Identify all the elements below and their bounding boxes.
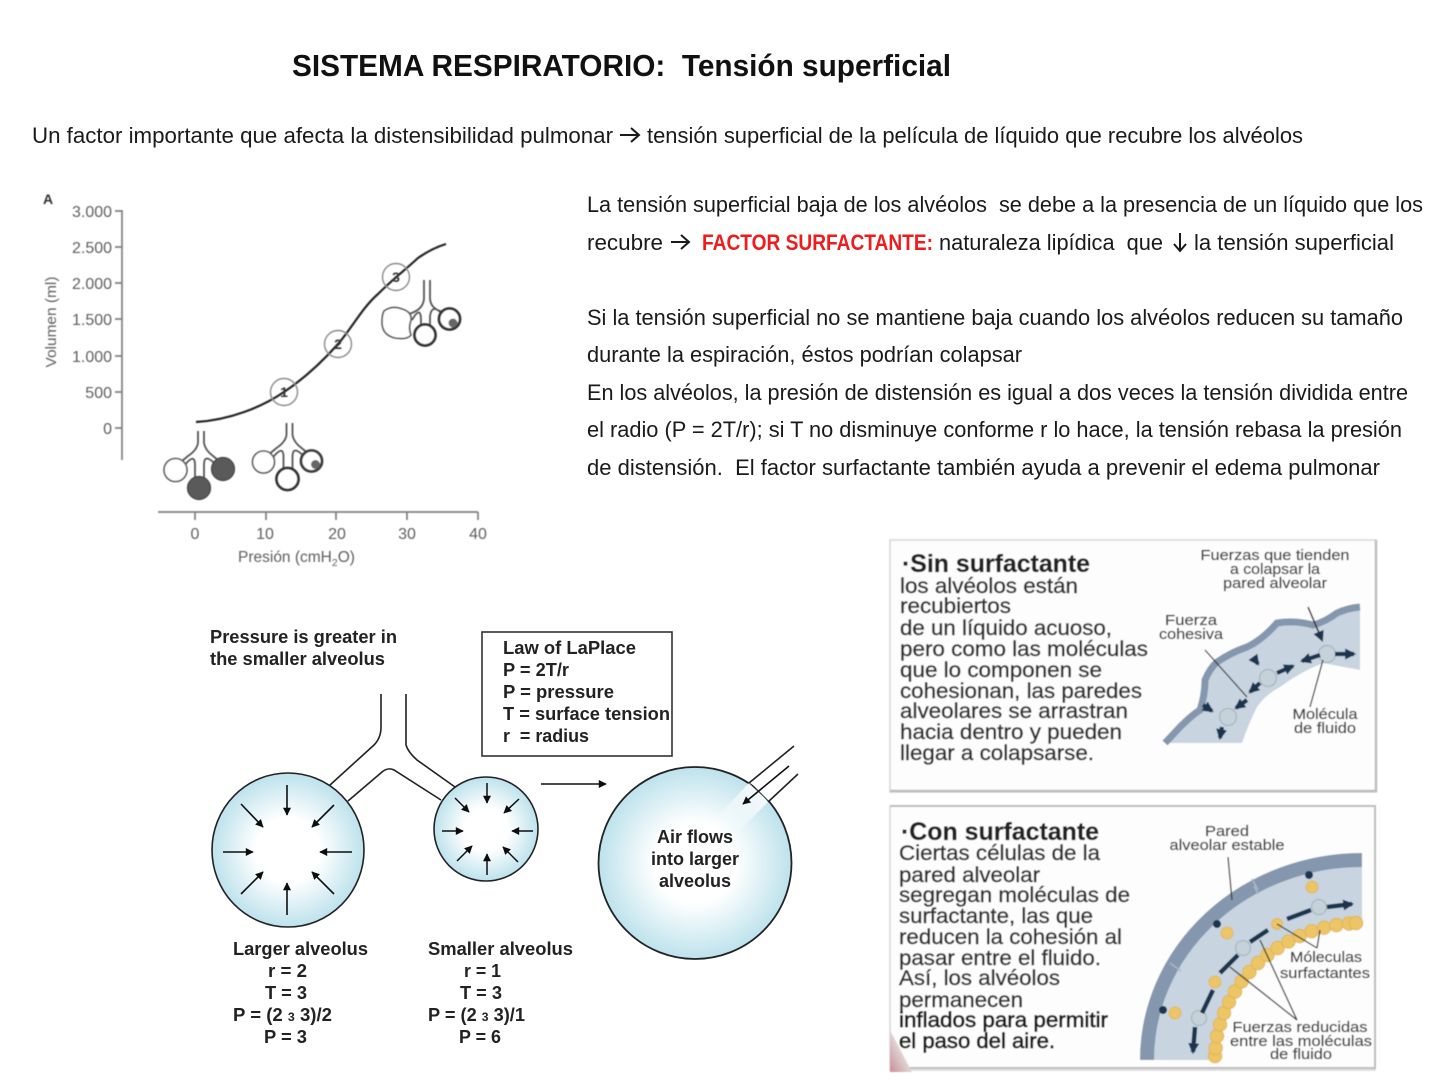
panel: sin surfactante xyxy=(890,540,1376,792)
panel text: llegar a colapsarse. xyxy=(900,742,1094,765)
explanatory text: el radio (P = 2T/r); si T no disminuye conforme r lo hace, la tensión rebasa la presión xyxy=(587,417,1402,442)
larger alveolus figures xyxy=(233,939,368,1047)
corner smudge xyxy=(890,1030,912,1072)
panel text: surfactante, las que xyxy=(899,905,1093,928)
fluid molecules xyxy=(1192,900,1326,1026)
y axis labels: 1.500 xyxy=(72,312,112,329)
larger alveolus figures: P = (2 3 3)/2 xyxy=(233,1005,332,1025)
illustration labels xyxy=(1170,823,1372,1063)
panel text xyxy=(900,575,1148,765)
x axis xyxy=(158,512,478,520)
surfactant layer xyxy=(1169,881,1363,1063)
x axis title: 2 xyxy=(332,557,338,569)
smaller alveolus figures: P = 6 xyxy=(459,1027,501,1047)
diagram heading: the smaller alveolus xyxy=(210,649,385,669)
illustration labels: surfactantes xyxy=(1280,965,1370,982)
larger alveolus figures: r = 2 xyxy=(268,961,307,981)
panel: con surfactante xyxy=(890,806,1375,1072)
panel text xyxy=(899,842,1130,1053)
molecules xyxy=(1220,646,1336,726)
compliance chart xyxy=(43,191,487,569)
point markers xyxy=(270,264,410,406)
pressure-volume curve xyxy=(196,244,446,422)
illustration labels: Pared xyxy=(1205,823,1249,840)
air-filled larger alveolus xyxy=(598,746,798,959)
explanatory text: La tensión superficial baja de los alvéolos se debe a la presencia de un líquido que los xyxy=(587,192,1423,217)
y axis xyxy=(115,210,122,460)
illustration labels: Fuerzas reducidas xyxy=(1232,1019,1368,1036)
explanatory text: recubre xyxy=(587,230,663,255)
illustration labels: alveolar estable xyxy=(1170,837,1284,854)
wall dots xyxy=(1159,871,1313,1014)
panel text: de un líquido acuoso, xyxy=(900,617,1112,640)
panel text: permanecen xyxy=(899,989,1023,1012)
explanatory text: FACTOR SURFACTANTE: xyxy=(702,230,933,255)
y axis labels: 1.000 xyxy=(72,349,112,366)
illustration labels: de fluido xyxy=(1270,1046,1332,1063)
x axis labels xyxy=(191,526,487,543)
larger alveolus figures: P = 3 xyxy=(264,1027,307,1047)
x axis labels: 10 xyxy=(256,526,274,543)
cohesive force arrows xyxy=(1203,654,1354,738)
bronchial branches xyxy=(330,694,455,801)
panel frame xyxy=(890,806,1375,1070)
wall segment marks xyxy=(1170,879,1258,971)
x axis labels: 40 xyxy=(469,526,487,543)
law of LaPlace box: P = pressure xyxy=(503,682,614,702)
y axis labels: 3.000 xyxy=(72,204,112,221)
y axis labels: 2.500 xyxy=(72,240,112,257)
explanatory text: la tensión superficial xyxy=(1194,230,1394,255)
panel text: reducen la cohesión al xyxy=(899,926,1122,949)
explanatory text: naturaleza lipídica que xyxy=(939,230,1163,255)
explanatory text: de distensión. El factor surfactante también ayuda a prevenir el edema pulmonar xyxy=(587,455,1380,480)
smaller alveolus figures: P = (2 3 3)/1 xyxy=(428,1005,525,1025)
panel heading: ·Sin surfactante xyxy=(902,550,1090,578)
panel text: pasar entre el fluido. xyxy=(899,947,1101,970)
stable alveolar wall illustration xyxy=(1140,853,1363,1063)
leader lines xyxy=(1228,857,1320,1020)
larger alveolus figures: Larger alveolus xyxy=(233,939,368,959)
y axis labels xyxy=(72,204,112,438)
point numbers: 1 xyxy=(280,384,288,400)
panel text: cohesionan, las paredes xyxy=(900,680,1142,703)
smaller alveolus figures xyxy=(428,939,573,1047)
law of LaPlace box: T = surface tension xyxy=(503,704,670,724)
point numbers: 3 xyxy=(392,269,400,285)
panel text: los alvéolos están xyxy=(900,575,1078,598)
point numbers: 2 xyxy=(334,336,342,352)
intro text: tensión superficial de la película de líquido que recubre los alvéolos xyxy=(647,123,1303,148)
alveoli at point 3 xyxy=(382,280,460,346)
diagram heading xyxy=(210,627,397,669)
law of LaPlace box xyxy=(482,632,672,756)
illustration labels: Fuerza xyxy=(1165,612,1218,629)
intro text xyxy=(32,123,1303,148)
illustration labels: a colapsar la xyxy=(1230,561,1321,578)
explanatory text: En los alvéolos, la presión de distensión es igual a dos veces la tensión dividida entre xyxy=(587,380,1408,405)
panel text: pared alveolar xyxy=(899,864,1040,887)
alveoli at point 1 xyxy=(252,423,322,490)
diagram heading: Pressure is greater in xyxy=(210,627,397,647)
reduced force arrows xyxy=(1193,904,1352,1052)
x axis labels: 20 xyxy=(328,526,346,543)
arrow between states xyxy=(541,783,606,785)
leader lines xyxy=(1205,607,1323,707)
illustration labels: cohesiva xyxy=(1159,626,1224,643)
Laplace diagram xyxy=(210,627,798,1047)
x axis title: Presión (cmH xyxy=(238,549,332,566)
x axis labels: 30 xyxy=(398,526,416,543)
law of LaPlace box: Law of LaPlace xyxy=(503,638,636,658)
y axis labels: 2.000 xyxy=(72,276,112,293)
explanatory text: Si la tensión superficial no se mantiene baja cuando los alvéolos reducen su tamaño xyxy=(587,305,1403,330)
air-filled larger alveolus: Air flows xyxy=(657,827,733,847)
panel text: inflados para permitir xyxy=(899,1009,1108,1032)
larger alveolus figures: T = 3 xyxy=(265,983,307,1003)
illustration labels: entre las moléculas xyxy=(1230,1033,1372,1050)
air-filled larger alveolus: into larger xyxy=(651,849,739,869)
explanatory text xyxy=(587,192,1423,480)
smaller alveolus xyxy=(434,777,538,881)
y axis labels: 500 xyxy=(85,385,112,402)
panel text: el paso del aire. xyxy=(899,1030,1055,1053)
y axis title: Volumen (ml) xyxy=(43,276,60,368)
panel text: hacia dentro y pueden xyxy=(900,721,1122,744)
alveolar wall illustration xyxy=(1165,607,1360,743)
smaller alveolus figures: T = 3 xyxy=(460,983,502,1003)
panel text: alveolares se arrastran xyxy=(900,700,1128,723)
chart panel letter: A xyxy=(43,191,53,207)
illustration labels: Molécula xyxy=(1292,706,1358,723)
law of LaPlace box: r = radius xyxy=(503,726,589,746)
illustration labels: de fluido xyxy=(1294,720,1356,737)
panel text: que lo componen se xyxy=(900,659,1102,682)
panel text: pero como las moléculas xyxy=(900,638,1148,661)
larger alveolus xyxy=(212,773,364,927)
law of LaPlace box: P = 2T/r xyxy=(503,660,569,680)
alveoli at point 0 xyxy=(164,431,234,500)
panel text: Así, los alvéolos xyxy=(899,967,1060,990)
air-filled larger alveolus: alveolus xyxy=(659,871,731,891)
panel frame xyxy=(890,540,1376,792)
illustration labels: Móleculas xyxy=(1290,949,1362,966)
panel heading: ·Con surfactante xyxy=(901,818,1099,846)
point numbers xyxy=(280,269,400,400)
x axis labels: 0 xyxy=(191,526,200,543)
illustration labels: pared alveolar xyxy=(1223,575,1327,592)
explanatory text: durante la espiración, éstos podrían colapsar xyxy=(587,342,1022,367)
smaller alveolus figures: r = 1 xyxy=(464,961,501,981)
illustration labels xyxy=(1159,547,1358,737)
panel text: Ciertas células de la xyxy=(899,842,1100,865)
illustration labels: Fuerzas que tienden xyxy=(1200,547,1350,564)
y axis labels: 0 xyxy=(103,421,112,438)
intro text: Un factor importante que afecta la distensibilidad pulmonar xyxy=(32,123,613,148)
smaller alveolus figures: Smaller alveolus xyxy=(428,939,573,959)
panel text: recubiertos xyxy=(900,595,1011,618)
panel text: segregan moléculas de xyxy=(899,884,1130,907)
x axis title: O) xyxy=(338,549,355,566)
title: SISTEMA RESPIRATORIO: Tensión superficial xyxy=(292,48,951,83)
